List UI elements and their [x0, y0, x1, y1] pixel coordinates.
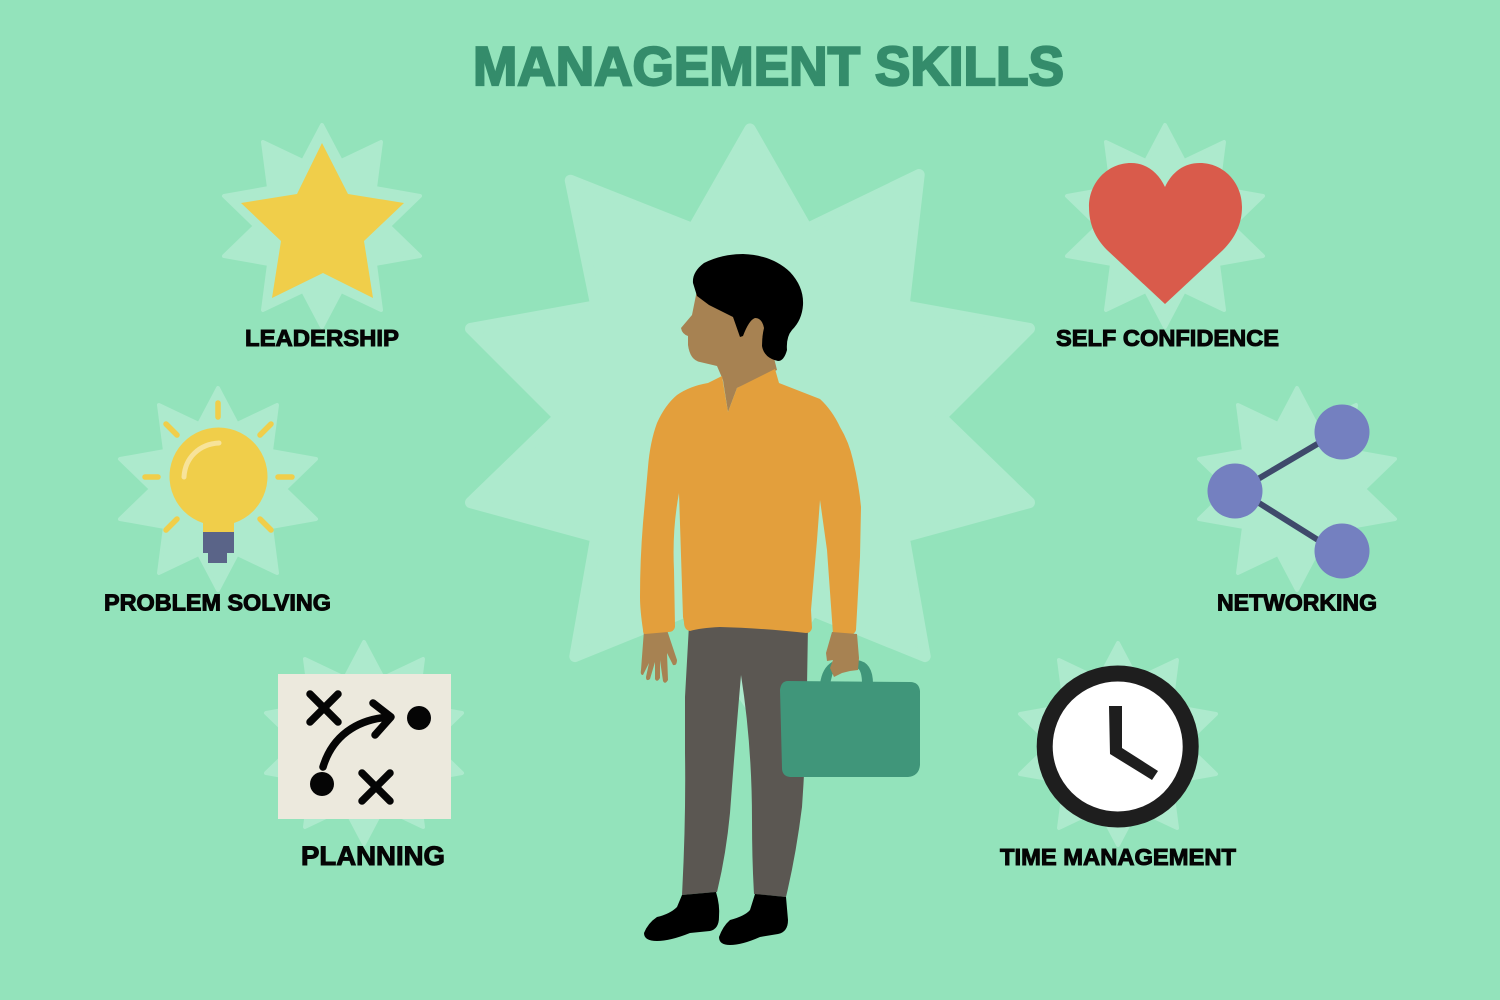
briefcase body: [780, 681, 920, 777]
skill: planning: [266, 642, 462, 871]
bulb base: [203, 532, 234, 563]
planning label: PLANNING: [301, 841, 445, 871]
person with briefcase: [640, 254, 920, 945]
connecting lines: [1258, 443, 1319, 540]
time management starburst: [1020, 643, 1216, 845]
bulb glass: [170, 428, 267, 535]
icon: clock: [1045, 674, 1191, 820]
skill: problem solving: [104, 388, 331, 616]
icon: strategy board: [278, 674, 451, 819]
hair: [693, 254, 803, 361]
start dot: [310, 772, 334, 796]
right hand: [826, 632, 859, 677]
problem solving starburst: [120, 388, 316, 590]
bulb highlight: [184, 443, 219, 477]
time management label: TIME MANAGEMENT: [1000, 844, 1237, 870]
leadership label: LEADERSHIP: [245, 325, 399, 351]
skill: leadership: [224, 125, 420, 351]
networking label: NETWORKING: [1217, 590, 1377, 616]
clock face: [1045, 674, 1191, 820]
central starburst: [471, 129, 1029, 705]
briefcase handle: [820, 660, 873, 684]
clock hands: [1109, 706, 1158, 780]
shirt: [640, 369, 861, 635]
icon: light bulb: [145, 403, 292, 563]
icon: star: [241, 143, 404, 298]
target dot: [407, 706, 431, 730]
self confidence label: SELF CONFIDENCE: [1056, 325, 1279, 351]
problem solving label: PROBLEM SOLVING: [104, 590, 331, 616]
leadership starburst: [224, 125, 420, 327]
networking starburst: [1199, 388, 1395, 590]
icon: heart: [1089, 163, 1242, 304]
right shoe: [719, 894, 788, 945]
title: MANAGEMENT SKILLS: [473, 35, 1064, 97]
planning starburst: [266, 642, 462, 844]
skill: time management: [1000, 643, 1237, 870]
skill: self confidence: [1056, 125, 1279, 351]
strategy marks: [310, 694, 391, 801]
face and neck: [681, 290, 777, 412]
left shoe: [644, 892, 719, 941]
self confidence starburst: [1067, 125, 1263, 327]
trousers: [682, 625, 808, 897]
left hand: [641, 630, 677, 683]
top node: [1314, 404, 1370, 460]
board: [278, 674, 451, 819]
skill: networking: [1199, 388, 1395, 616]
left node: [1208, 464, 1262, 518]
icon: network nodes: [1208, 404, 1370, 578]
bottom node: [1314, 524, 1370, 578]
bulb rays: [145, 403, 292, 530]
